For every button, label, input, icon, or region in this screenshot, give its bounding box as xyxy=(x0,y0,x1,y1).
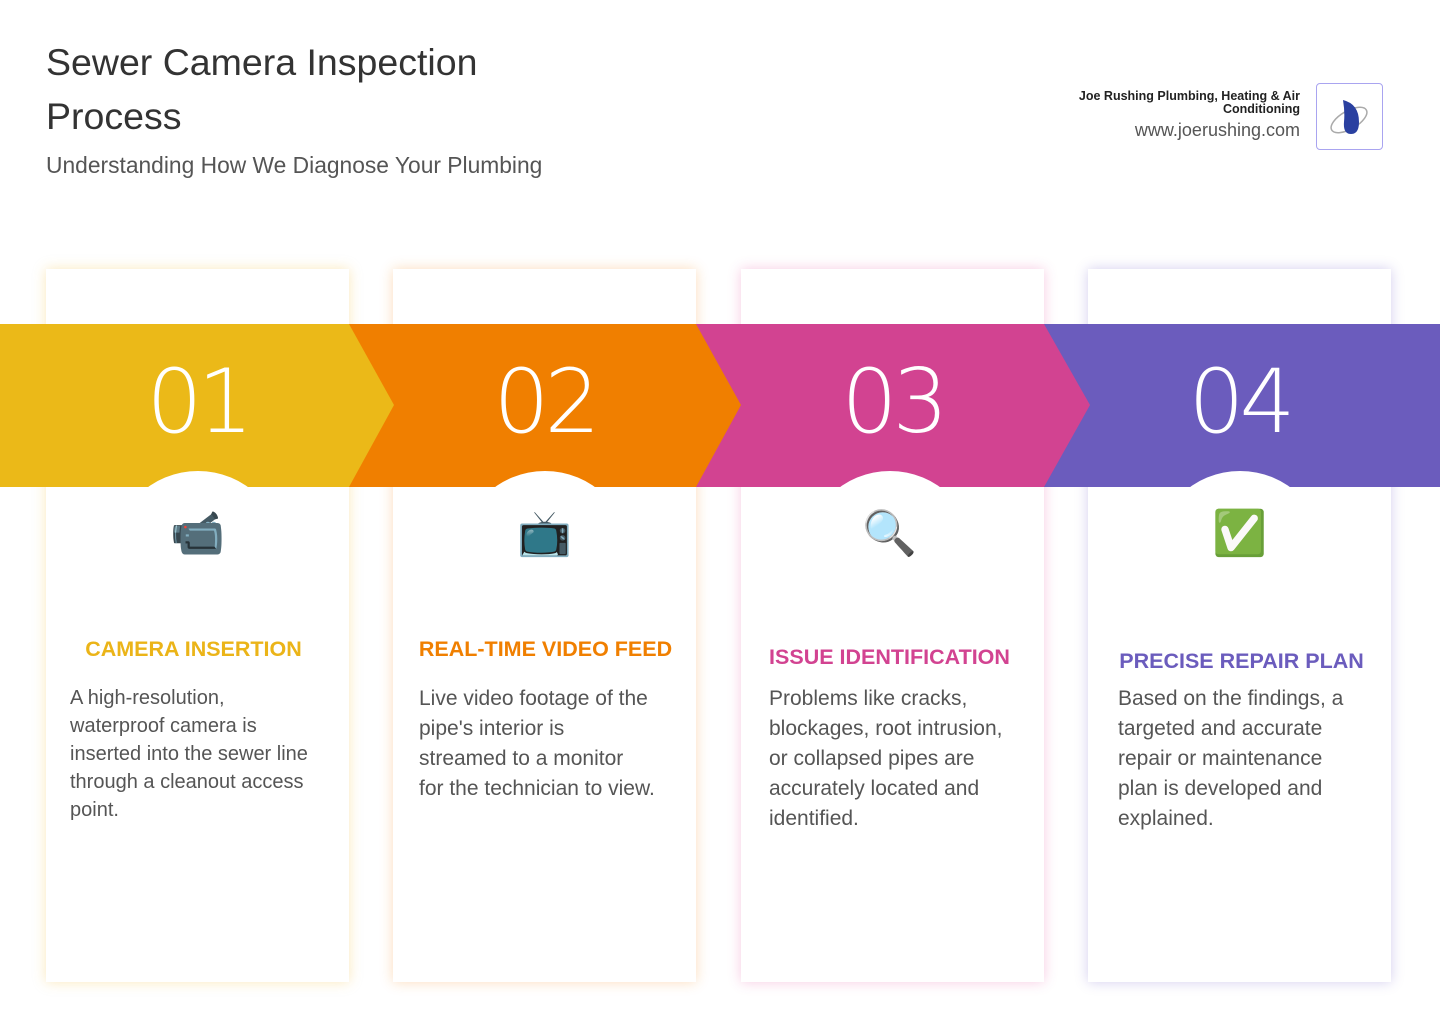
brand: Joe Rushing Plumbing, Heating & Air xyxy=(1079,89,1300,103)
text: REAL-TIME VIDEO FEED xyxy=(419,637,672,661)
text: 04 xyxy=(1188,350,1290,453)
text: 01 xyxy=(146,350,248,453)
text: CAMERA INSERTION xyxy=(85,637,302,661)
text: 📺 xyxy=(517,509,572,558)
text: 03 xyxy=(842,350,943,453)
text: Live video footage of the xyxy=(419,687,648,710)
cards xyxy=(46,269,349,982)
text: 📹 xyxy=(170,509,225,558)
step 1 xyxy=(70,350,308,821)
text: for the technician to view. xyxy=(419,777,655,800)
step 2 xyxy=(419,350,672,800)
text: ✅ xyxy=(1212,509,1267,558)
brand: Conditioning xyxy=(1223,102,1300,116)
logo xyxy=(1316,83,1383,150)
title: Process xyxy=(46,95,181,137)
text: 02 xyxy=(494,350,595,453)
subtitle: Understanding How We Diagnose Your Plumbing xyxy=(46,152,542,178)
text: 🔍 xyxy=(862,509,917,558)
brand xyxy=(1079,89,1300,140)
arrow band xyxy=(0,324,1440,487)
text: Based on the findings, a targeted and accurate repair or maintenance plan is developed and explained. xyxy=(1118,687,1343,830)
brand: www.joerushing.com xyxy=(1135,120,1300,140)
text: pipe's interior is xyxy=(419,717,564,740)
text: A high-resolution, waterproof camera is inserted into the sewer line through a cleanout access point. xyxy=(70,687,308,821)
text: ISSUE IDENTIFICATION xyxy=(769,645,1010,669)
title xyxy=(46,41,477,137)
step 3 xyxy=(769,350,1010,830)
text: streamed to a monitor xyxy=(419,747,623,770)
step 4 xyxy=(1118,350,1364,830)
text: PRECISE REPAIR PLAN xyxy=(1119,649,1364,673)
text: Problems like cracks, blockages, root intrusion, or collapsed pipes are accurately located and identified. xyxy=(769,687,1002,830)
title: Sewer Camera Inspection xyxy=(46,41,477,83)
